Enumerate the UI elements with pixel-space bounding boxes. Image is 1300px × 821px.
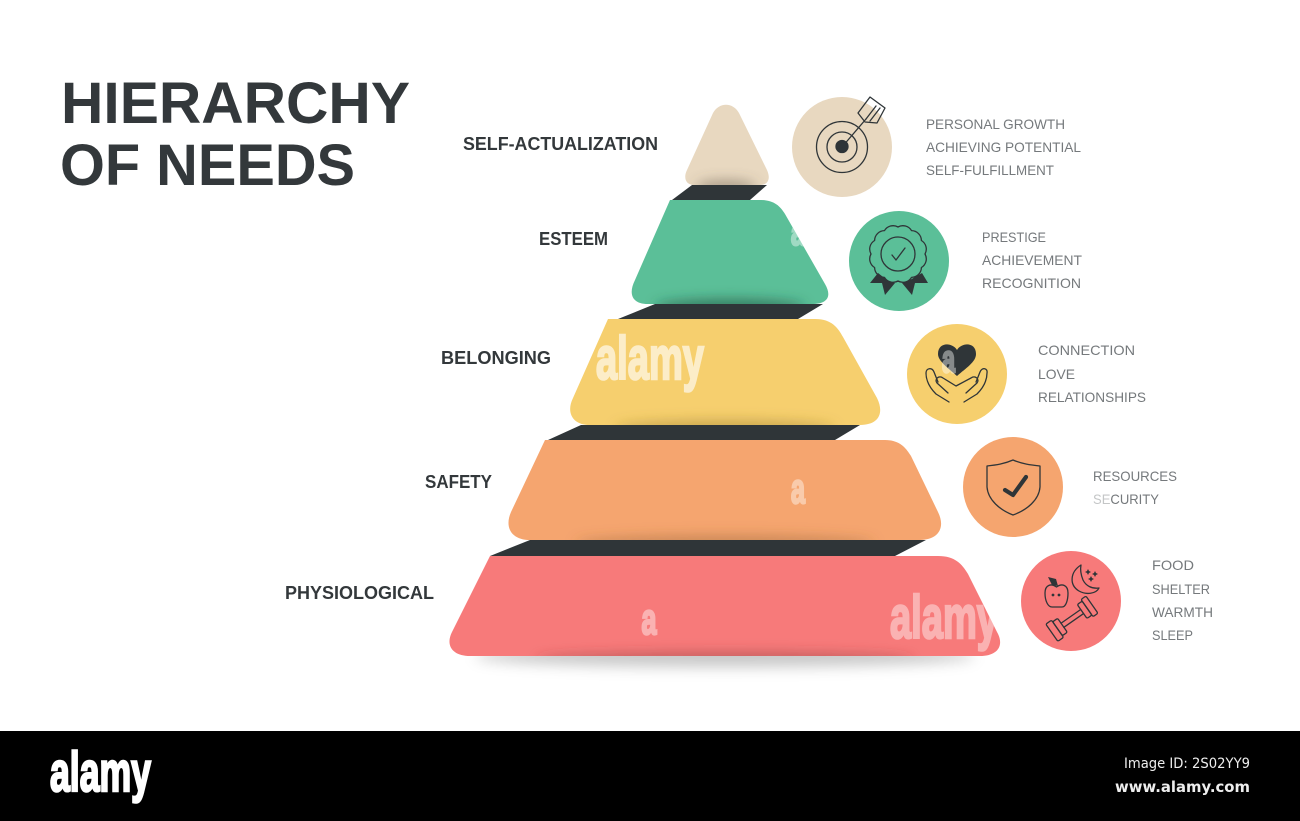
- image id: Image ID: 2S02YY9: [1124, 756, 1250, 772]
- footer logo: alamy: [50, 740, 151, 803]
- circle: physiological icon: [1021, 551, 1121, 651]
- circle: esteem icon: [849, 211, 949, 311]
- list: esteem: [982, 229, 1082, 291]
- list: physiological: SHELTER: [1152, 581, 1210, 597]
- label: physiological: PHYSIOLOGICAL: [285, 583, 434, 603]
- list: physiological: WARMTH: [1152, 604, 1213, 620]
- list: physiological: [1152, 557, 1213, 643]
- tier: physiological: a: [642, 595, 657, 644]
- circle: safety icon: [963, 437, 1063, 537]
- list: esteem: ACHIEVEMENT: [982, 252, 1082, 268]
- list: self-actualization: ACHIEVING POTENTIAL: [926, 139, 1081, 155]
- tier: physiological: [450, 556, 1000, 656]
- tier: esteem: a: [791, 212, 806, 253]
- icon: apple, moon and dumbbell: [1045, 565, 1099, 641]
- list: safety: [1093, 468, 1177, 507]
- label: safety: SAFETY: [425, 472, 492, 492]
- label: self-actualization: SELF-ACTUALIZATION: [463, 134, 658, 154]
- list: physiological: SLEEP: [1152, 627, 1193, 643]
- list: safety: RESOURCES: [1093, 468, 1177, 484]
- title: OF NEEDS: [60, 133, 355, 198]
- step shadow bands: [490, 185, 926, 556]
- icon: heart in hands: a: [942, 339, 956, 381]
- list: belonging: RELATIONSHIPS: [1038, 389, 1146, 405]
- tier: self-actualization: [685, 104, 769, 185]
- list: self-actualization: [926, 116, 1081, 178]
- circle: self-actualization icon: [792, 97, 892, 197]
- tier: physiological: alamy: [890, 584, 998, 651]
- circle: belonging icon: [907, 324, 1007, 424]
- pyramid: [445, 100, 1010, 667]
- list: esteem: RECOGNITION: [982, 275, 1081, 291]
- footer bar: [0, 731, 1300, 821]
- tier: belonging: [570, 319, 880, 425]
- tier: belonging: alamy: [596, 325, 704, 392]
- title: HIERARCHY: [61, 71, 410, 136]
- title: [60, 71, 410, 198]
- label: belonging: BELONGING: [441, 348, 551, 368]
- label: esteem: ESTEEM: [539, 229, 608, 249]
- icon: target with arrow: [816, 97, 885, 172]
- list: belonging: CONNECTION: [1038, 342, 1135, 358]
- ground shadow: [475, 645, 975, 667]
- list: belonging: LOVE: [1038, 366, 1075, 382]
- tier: esteem: [632, 200, 828, 304]
- list: safety: SECURITY: [1093, 491, 1160, 507]
- website: www.alamy.com: [1115, 778, 1250, 796]
- tier: safety: a: [791, 465, 805, 512]
- tier: safety: [508, 440, 942, 540]
- icon: award badge: [870, 226, 928, 295]
- list: physiological: FOOD: [1152, 557, 1194, 573]
- list: self-actualization: PERSONAL GROWTH: [926, 116, 1065, 132]
- tier labels: [285, 134, 658, 603]
- icon: shield with check: [987, 460, 1040, 515]
- list: self-actualization: SELF-FULFILLMENT: [926, 162, 1054, 178]
- list: esteem: PRESTIGE: [982, 229, 1046, 245]
- list: belonging: [1038, 342, 1146, 405]
